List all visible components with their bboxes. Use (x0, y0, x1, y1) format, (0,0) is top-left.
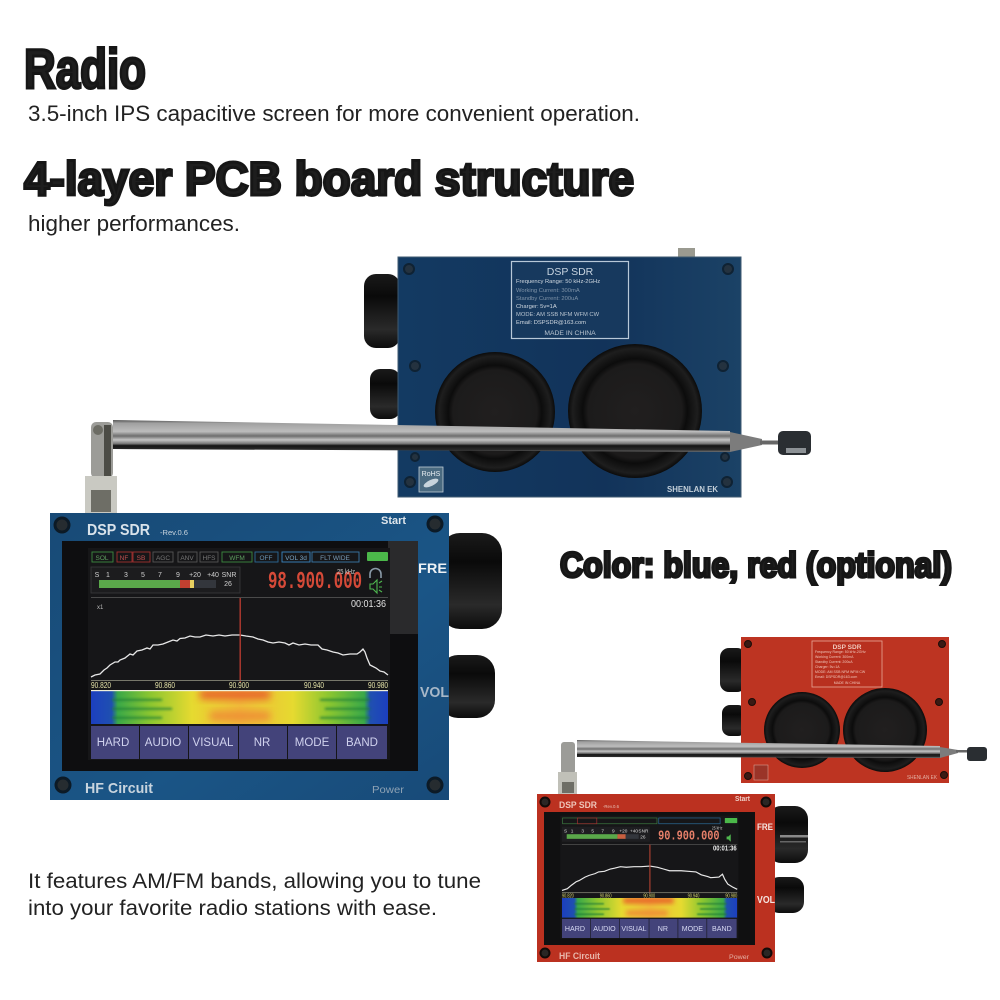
device: red radio front (537, 794, 808, 962)
status row: AGC (156, 555, 170, 562)
panel labels (559, 796, 775, 962)
frequency axis: 90.940 (304, 681, 324, 690)
signal meter: SNR (638, 828, 649, 833)
status row: WFM (229, 555, 245, 562)
panel labels: -Rev.0.6 (160, 530, 188, 537)
frequency axis: 90.940 (688, 893, 700, 899)
frequency axis: 90.980 (368, 681, 388, 690)
spec label: Working Current: 300mA (815, 655, 854, 659)
signal meter (562, 827, 650, 842)
spec label: Working Current: 300mA (516, 288, 580, 294)
center marker (240, 598, 241, 682)
screen bezel (544, 812, 755, 945)
display: spectrum UI (88, 548, 390, 760)
panel labels: VOL (420, 685, 449, 701)
panel labels: DSP SDR (559, 800, 597, 811)
touch buttons: AUDIO (593, 926, 616, 933)
screen bezel (62, 541, 418, 771)
screws (404, 264, 733, 487)
screws (540, 798, 772, 958)
status row (92, 552, 359, 562)
signal meter: +40 (630, 828, 638, 833)
frequency axis (91, 680, 388, 690)
frequency axis (562, 892, 737, 899)
frequency axis: 90.860 (600, 893, 612, 899)
brand text: SHENLAN EK (667, 484, 719, 494)
panel labels: Power (372, 784, 405, 796)
back knobs (364, 274, 400, 419)
center marker (649, 845, 650, 893)
screws (55, 517, 442, 792)
panel labels: HF Circuit (559, 951, 601, 962)
signal meter: 9 (176, 572, 180, 579)
antenna connector on back (678, 248, 695, 258)
timer: 00:01:36 (351, 598, 386, 610)
frequency axis: 90.900 (643, 893, 655, 899)
headphone icon (370, 568, 381, 578)
signal meter: 1 (571, 828, 574, 833)
touch buttons: HARD (565, 926, 585, 933)
battery (367, 552, 388, 561)
title: Radio: Radio (24, 37, 146, 100)
knobs (768, 806, 808, 913)
divider line (562, 843, 737, 846)
panel labels: Start (381, 515, 406, 527)
speakers (764, 688, 927, 772)
touch buttons: VISUAL (621, 926, 647, 933)
spec label: Charger: 5v=1A (815, 665, 840, 669)
status row: OFF (260, 555, 273, 562)
brand text: SHENLAN EK (907, 775, 937, 781)
signal meter: 7 (601, 828, 604, 833)
signal meter: S (95, 572, 100, 579)
display: spectrum UI: x1 (97, 605, 104, 611)
front panel (537, 794, 775, 962)
heading: color options: Color: blue, red (optional) (560, 546, 952, 585)
touch buttons (562, 919, 737, 938)
signal meter: +20 (619, 828, 628, 833)
frequency axis: 90.900 (229, 681, 249, 690)
heading: 4-layer PCB board structure: 4-layer PCB board structure (24, 152, 634, 205)
speakers (435, 344, 702, 478)
panel labels: -Rev.0.6 (603, 804, 619, 809)
touch buttons: MODE (682, 926, 703, 933)
back panel (741, 637, 949, 783)
signal meter: 9 (612, 828, 615, 833)
panel labels: HF Circuit (85, 780, 153, 797)
panel labels: Start (735, 796, 751, 803)
speaker icon (370, 580, 382, 593)
touch buttons: HARD (97, 737, 129, 749)
frequency readout: 90.900.000 (658, 829, 720, 844)
panel labels: VOL (757, 895, 775, 906)
panel labels: Power (729, 954, 750, 961)
touch buttons: NR (658, 926, 668, 933)
frequency axis: 90.820 (91, 681, 111, 690)
frequency axis: 90.980 (725, 893, 737, 899)
spec label: MODE: AM SSB NFM WFM CW (516, 312, 600, 318)
spec label: Frequency Range: 50 kHz-2GHz (815, 650, 866, 654)
touch buttons: BAND (346, 737, 378, 749)
status row: NF (120, 555, 128, 562)
spec label: Charger: 5v=1A (516, 304, 557, 310)
antenna: red radio (558, 740, 987, 794)
text: screen description: 3.5-inch IPS capacitive screen for more convenient operation. (28, 101, 640, 126)
spec label: MODE: AM SSB NFM WFM CW (815, 670, 866, 674)
frequency axis: 90.860 (155, 681, 175, 690)
text: AM/FM feature: It features AM/FM bands, allowing you to tune (28, 870, 481, 893)
display: spectrum UI: 25 kHz (712, 826, 723, 831)
status row: HFS (202, 555, 216, 562)
speaker icon (727, 834, 731, 842)
spec label: Standby Current: 200uA (815, 660, 853, 664)
knobs (440, 533, 502, 718)
touch buttons: NR (254, 737, 270, 749)
spec label: DSP SDR (833, 644, 862, 651)
text: AM/FM feature: into your favorite radio stations with ease. (28, 897, 437, 920)
panel labels: FRE (757, 822, 773, 832)
spec label: MADE IN CHINA (834, 681, 861, 685)
antenna: blue radio (85, 420, 811, 513)
display: spectrum UI: 25 kHz (337, 569, 355, 576)
signal meter: 26 (640, 834, 646, 839)
touch buttons: AUDIO (145, 737, 181, 749)
signal meter: 26 (224, 581, 232, 588)
spectrum curve (91, 635, 388, 677)
waterfall (562, 898, 737, 918)
signal meter: SNR (222, 572, 236, 579)
spec label: Email: DSPSDR@163.com (815, 675, 857, 679)
spec label: Email: DSPSDR@163.com (516, 320, 586, 326)
back knobs (720, 648, 746, 736)
device: blue radio front (50, 513, 502, 800)
signal meter: 3 (581, 828, 584, 833)
status row: VOL 3d (285, 555, 307, 562)
status row: ANV (180, 555, 194, 562)
signal meter: 1 (106, 572, 110, 579)
device: red radio back (720, 637, 949, 783)
text: higher performances: higher performances. (28, 211, 240, 236)
status row: FLT WIDE (320, 555, 351, 562)
signal meter: 5 (591, 828, 594, 833)
status row: SOL (95, 555, 109, 562)
spectrum curve (562, 866, 737, 890)
spec label: Frequency Range: 50 kHz-2GHz (516, 279, 600, 285)
status row (563, 818, 737, 824)
spec label: MADE IN CHINA (544, 330, 596, 337)
frequency readout: 98.900.000 (268, 569, 362, 596)
waterfall (91, 690, 388, 724)
panel labels: DSP SDR (87, 522, 150, 539)
spec label (812, 641, 882, 687)
signal meter: 7 (158, 572, 162, 579)
touch buttons (91, 726, 387, 759)
screws (744, 640, 948, 780)
signal meter: 3 (124, 572, 128, 579)
spec label: DSP SDR (547, 266, 594, 278)
signal meter: +40 (207, 572, 219, 579)
RoHS mark: RoHS (422, 471, 441, 478)
signal meter: +20 (189, 572, 201, 579)
spec label (512, 262, 628, 338)
signal meter: S (564, 828, 567, 833)
touch buttons: BAND (712, 926, 732, 933)
panel labels: FRE (418, 560, 447, 576)
front panel (50, 513, 449, 800)
spec label: Standby Current: 200uA (516, 296, 578, 302)
panel labels (85, 515, 449, 797)
timer: 00:01:36 (713, 845, 737, 852)
back panel (398, 257, 741, 497)
touch buttons: VISUAL (193, 737, 234, 749)
divider line (91, 597, 388, 598)
RoHS mark (419, 467, 443, 492)
signal meter: 5 (141, 572, 145, 579)
RoHS mark (754, 765, 768, 780)
status row: SB (137, 555, 145, 562)
device: blue radio back (364, 248, 741, 497)
touch buttons: MODE (295, 737, 330, 749)
signal meter (91, 567, 240, 593)
text: AM/FM feature (28, 870, 481, 920)
display: spectrum UI (560, 816, 738, 939)
frequency axis: 90.820 (562, 893, 574, 899)
